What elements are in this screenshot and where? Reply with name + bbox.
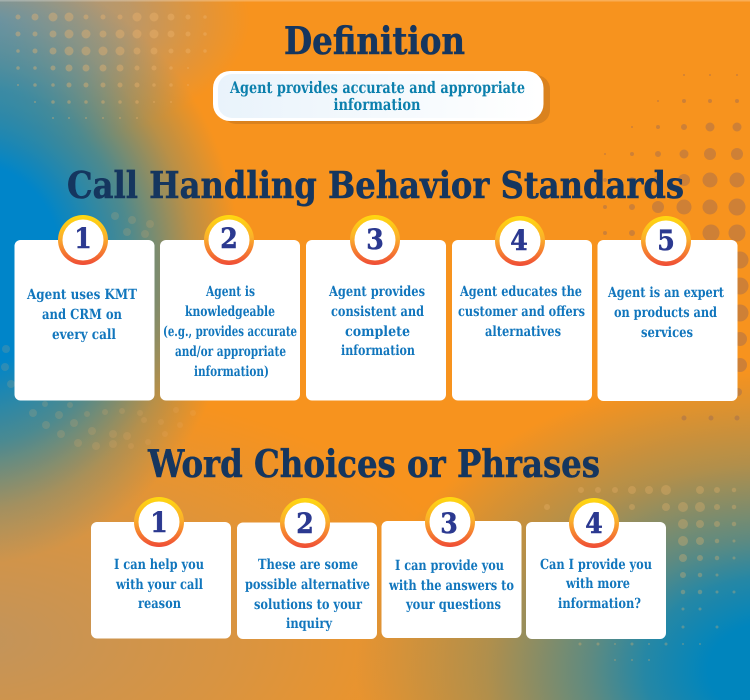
panel: standard 2: Agent is — [205, 284, 255, 300]
panel: phrase 3: your questions — [405, 597, 501, 613]
panel: standard 2: and/or appropriate — [175, 344, 286, 360]
panel: standard 4: Agent educates the — [459, 284, 582, 300]
panel: standard 4: customer and offers — [458, 304, 585, 320]
panel: phrase 2: 2 — [296, 507, 314, 540]
panel: standard 3: complete — [345, 324, 410, 340]
panel: phrase 2: inquiry — [286, 616, 333, 632]
panel: standard 4 — [452, 216, 592, 400]
panel: standard 1: 1 — [74, 222, 92, 255]
panel: phrase 3 — [382, 497, 522, 638]
halftone dots: top left — [18, 17, 205, 118]
panel: standard 2: knowledgeable — [185, 304, 275, 320]
panel: phrase 1: 1 — [150, 506, 168, 539]
panel: standard 4: alternatives — [485, 324, 561, 340]
panel: phrase 2: These are some — [258, 557, 358, 573]
halftone dots: lower left — [5, 216, 193, 446]
panel: standard 1: Agent uses KMT — [26, 287, 138, 303]
panel: standard 2 — [160, 215, 300, 400]
panel: phrase 4: 4 — [585, 507, 603, 540]
panel: standard 5: 5 — [657, 224, 675, 257]
panel: phrase 4: with more — [565, 576, 630, 592]
halftone dots: top right — [605, 75, 740, 418]
definition callout — [213, 71, 550, 124]
panel: standard 4: 4 — [510, 224, 528, 257]
panel: standard 5: on products and — [614, 305, 717, 321]
panel: standard 2: (e.g., provides accurate — [163, 324, 297, 340]
panel: phrase 1: I can help you — [114, 557, 204, 573]
panel: phrase 2: possible alternative — [245, 577, 370, 593]
panel: phrase 1: with your call — [115, 577, 203, 593]
panel: standard 3: information — [341, 343, 415, 359]
panel: standard 2: 2 — [220, 222, 238, 255]
panel: phrase 4 — [526, 498, 666, 639]
panel: standard 5 — [598, 216, 738, 401]
panel: phrase 3: with the answers to — [388, 578, 514, 594]
panel: standard 3: Agent provides — [328, 284, 425, 300]
panel: phrase 2 — [237, 498, 377, 639]
panel: standard 1: and CRM on — [42, 307, 122, 323]
panel: standard 3: 3 — [366, 223, 384, 256]
panel: phrase 3: I can provide you — [395, 558, 504, 574]
panel: phrase 4: information? — [558, 596, 641, 612]
heading: Word Choices or Phrases: Word Choices or Phrases — [147, 441, 600, 486]
panel: phrase 1: reason — [138, 596, 181, 612]
panel: standard 1: every call — [52, 327, 116, 343]
panel: standard 2: information) — [194, 364, 269, 380]
panel: standard 1 — [14, 215, 154, 400]
definition callout: information — [334, 95, 421, 114]
panel: standard 5: Agent is an expert — [607, 285, 724, 301]
definition callout: Agent provides accurate and appropriate — [229, 78, 525, 97]
panel: phrase 2: solutions to your — [254, 597, 362, 613]
panel: standard 3: consistent and — [331, 304, 424, 320]
panel: phrase 4: Can I provide you — [540, 557, 652, 573]
panel: standard 5: services — [641, 325, 693, 341]
heading: Definition: Definition — [284, 18, 465, 63]
panel: phrase 1 — [91, 497, 231, 638]
halftone dots: bottom right — [547, 490, 734, 660]
heading: Call Handling Behavior Standards: Call Handling Behavior Standards — [67, 163, 684, 207]
panel: phrase 3: 3 — [440, 507, 458, 540]
panel: standard 3 — [306, 215, 446, 400]
